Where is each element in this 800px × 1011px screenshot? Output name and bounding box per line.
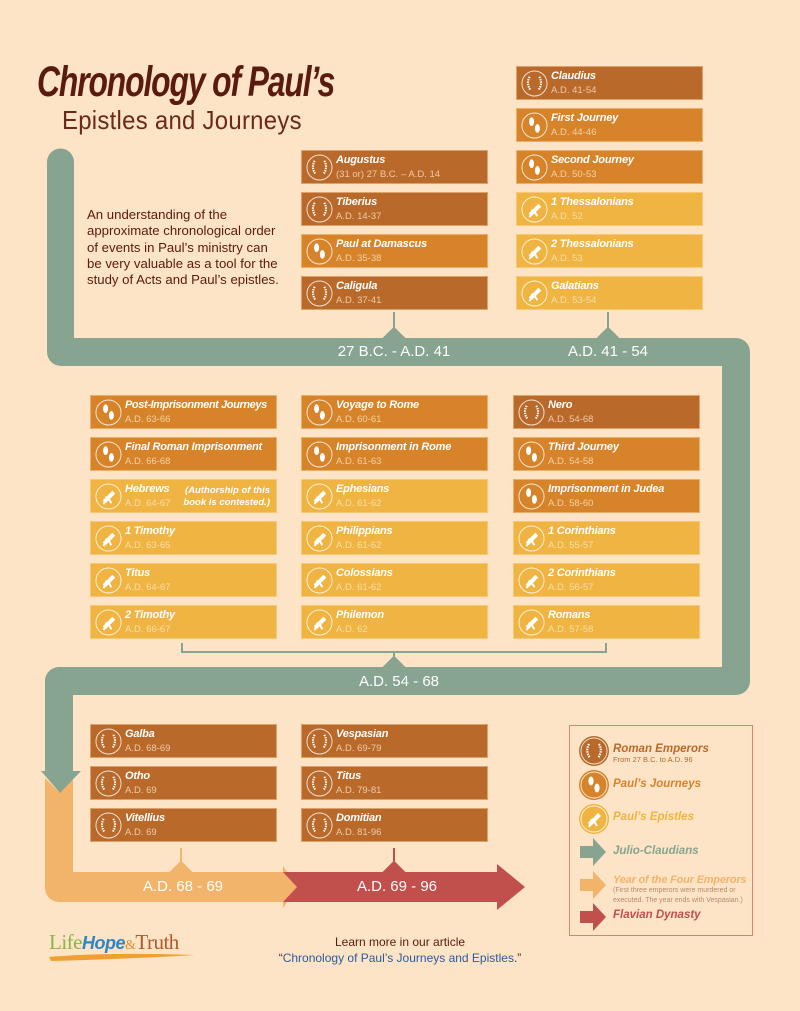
box: 1 Thessalonians: A.D. 52 [551, 211, 583, 222]
box: Ephesians [301, 479, 488, 513]
box: Third Journey: Third Journey [548, 441, 619, 453]
box: 1 Corinthians: 1 Corinthians [548, 525, 616, 537]
box: Otho [90, 766, 277, 800]
legend: Year of the Four Emperors: (First three emperors were murdered or [613, 887, 736, 894]
red arrow [283, 864, 525, 910]
footer text [279, 935, 521, 965]
box: Galba: Galba [125, 728, 155, 740]
box: Domitian [301, 808, 488, 842]
label: AD 54 - 68: A.D. 54 - 68 [359, 673, 439, 690]
box: Post-Imprisonment Journeys: A.D. 63-66 [125, 414, 170, 425]
box: Vespasian: A.D. 69-79 [336, 743, 381, 754]
box: Otho: A.D. 69 [125, 785, 157, 796]
box: Augustus [301, 150, 488, 184]
intro text: approximate chronological order [87, 223, 275, 238]
box: Caligula: Caligula [336, 280, 377, 292]
box: Nero [513, 395, 700, 429]
green band [45, 148, 750, 773]
box: Romans: A.D. 57-58 [548, 624, 593, 635]
box: Hebrews: A.D. 64-67 [125, 498, 170, 509]
box: Voyage to Rome: Voyage to Rome [336, 399, 419, 411]
box: Vespasian [301, 724, 488, 758]
legend: journeys icon [579, 770, 609, 800]
box: Second Journey: Second Journey [551, 154, 634, 166]
box: Otho: Otho [125, 770, 150, 782]
box: Domitian: A.D. 81-96 [336, 827, 381, 838]
box: Hebrews: Hebrews [125, 483, 169, 495]
box: Galatians: A.D. 53-54 [551, 295, 596, 306]
legend: epistles icon [579, 804, 609, 834]
box: Claudius [516, 66, 703, 100]
box: 1 Timothy: 1 Timothy [125, 525, 175, 537]
box: Philemon [301, 605, 488, 639]
label: AD 68 - 69: A.D. 68 - 69 [143, 878, 223, 895]
legend: emperors icon [579, 736, 609, 766]
box: Titus emperor: A.D. 79-81 [336, 785, 381, 796]
box: Nero: A.D. 54-68 [548, 414, 593, 425]
box: Voyage to Rome: A.D. 60-61 [336, 414, 381, 425]
box: Domitian: Domitian [336, 812, 381, 824]
intro text: of events in Paul’s ministry can [87, 240, 268, 255]
box: Philippians: A.D. 61-62 [336, 540, 381, 551]
box: 2 Timothy [90, 605, 277, 639]
box: 1 Corinthians: A.D. 55-57 [548, 540, 593, 551]
box: Titus emperor [301, 766, 488, 800]
footer text: Learn more in our article [335, 935, 465, 949]
green arrowhead [41, 771, 81, 793]
legend: Julio-Claudians: Julio-Claudians [613, 845, 699, 857]
legend: Roman Emperors [613, 743, 709, 764]
box: Vitellius: A.D. 69 [125, 827, 157, 838]
box: 1 Thessalonians [516, 192, 703, 226]
box: Caligula: A.D. 37-41 [336, 295, 381, 306]
box: 2 Timothy: 2 Timothy [125, 609, 175, 621]
legend: Year of the Four Emperors [613, 874, 746, 904]
box: Colossians [301, 563, 488, 597]
label: AD 41 - 54: A.D. 41 - 54 [568, 343, 648, 360]
box: Titus epistle [90, 563, 277, 597]
box: Vitellius [90, 808, 277, 842]
box: Hebrews: book is contested.) [183, 497, 270, 508]
box: Claudius: A.D. 41-54 [551, 85, 596, 96]
box: Paul at Damascus: A.D. 35-38 [336, 253, 381, 264]
box: 2 Timothy: A.D. 66-67 [125, 624, 170, 635]
box: 1 Corinthians [513, 521, 700, 555]
box: Hebrews [90, 479, 277, 513]
connectors [182, 312, 618, 667]
subtitle: Epistles and Journeys [62, 105, 302, 135]
box: Augustus: (31 or) 27 B.C. – A.D. 14 [336, 169, 440, 180]
label: 27 BC - AD 41: 27 B.C. - A.D. 41 [338, 343, 450, 360]
box: Imprisonment in Rome [301, 437, 488, 471]
box: 2 Corinthians [513, 563, 700, 597]
title: Chronology of Paul’s [37, 58, 334, 106]
legend: green arrow [580, 838, 606, 866]
box: Voyage to Rome [301, 395, 488, 429]
box: Caligula [301, 276, 488, 310]
box: Galatians [516, 276, 703, 310]
legend: Paul's Journeys: Paul’s Journeys [613, 778, 701, 790]
legend: red arrow [580, 903, 606, 931]
box: 2 Corinthians: A.D. 56-57 [548, 582, 593, 593]
box: Titus epistle: Titus [125, 567, 150, 579]
box: 1 Timothy [90, 521, 277, 555]
box: Philemon: A.D. 62 [336, 624, 368, 635]
box: 2 Corinthians: 2 Corinthians [548, 567, 616, 579]
box: Nero: Nero [548, 399, 572, 411]
box: 2 Thessalonians: A.D. 53 [551, 253, 583, 264]
box: Colossians: A.D. 61-62 [336, 582, 381, 593]
box: First Journey: A.D. 44-46 [551, 127, 596, 138]
intro text: An understanding of the [87, 207, 227, 222]
box: Third Journey: A.D. 54-58 [548, 456, 593, 467]
legend: Paul's Epistles: Paul’s Epistles [613, 811, 694, 823]
box: Tiberius: A.D. 14-37 [336, 211, 381, 222]
box: Tiberius: Tiberius [336, 196, 377, 208]
box: Imprisonment in Rome: A.D. 61-63 [336, 456, 381, 467]
box: Third Journey [513, 437, 700, 471]
box: Philemon: Philemon [336, 609, 384, 621]
box: Augustus: Augustus [336, 154, 385, 166]
footer text: “Chronology of Paul’s Journeys and Epistles.” [279, 951, 521, 965]
box: Philippians: Philippians [336, 525, 392, 537]
logo [49, 930, 194, 961]
box: Titus emperor: Titus [336, 770, 361, 782]
legend: Year of the Four Emperors: Year of the Four Emperors [613, 874, 746, 886]
orange band [45, 778, 297, 908]
box: Vespasian: Vespasian [336, 728, 388, 740]
legend: Roman Emperors: Roman Emperors [613, 743, 709, 755]
intro text [87, 207, 279, 287]
box: 2 Thessalonians [516, 234, 703, 268]
box: Second Journey [516, 150, 703, 184]
box: Galba [90, 724, 277, 758]
box: Ephesians: A.D. 61-62 [336, 498, 381, 509]
legend: Roman Emperors: From 27 B.C. to A.D. 96 [613, 755, 693, 764]
box: Final Roman Imprisonment [90, 437, 277, 471]
box: Romans: Romans [548, 609, 590, 621]
box: Imprisonment in Judea [513, 479, 700, 513]
box: 1 Timothy: A.D. 63-65 [125, 540, 170, 551]
intro text: study of Acts and Paul’s epistles. [87, 272, 279, 287]
legend [569, 725, 753, 936]
box: First Journey [516, 108, 703, 142]
box: Titus epistle: A.D. 64-67 [125, 582, 170, 593]
box: Paul at Damascus [301, 234, 488, 268]
legend: Flavian Dynasty: Flavian Dynasty [613, 909, 701, 921]
box: Tiberius [301, 192, 488, 226]
box: Final Roman Imprisonment: A.D. 66-68 [125, 456, 170, 467]
box: Vitellius: Vitellius [125, 812, 165, 824]
box: Post-Imprisonment Journeys [90, 395, 277, 429]
legend: light orange arrow [580, 871, 606, 899]
box: Philippians [301, 521, 488, 555]
box: 1 Thessalonians: 1 Thessalonians [551, 196, 634, 208]
box: Galba: A.D. 68-69 [125, 743, 170, 754]
box: Ephesians: Ephesians [336, 483, 389, 495]
box: 2 Thessalonians: 2 Thessalonians [551, 238, 634, 250]
box: Second Journey: A.D. 50-53 [551, 169, 596, 180]
box: Post-Imprisonment Journeys: Post-Imprisonment Journeys [125, 399, 267, 411]
box: First Journey: First Journey [551, 112, 618, 124]
box: Colossians: Colossians [336, 567, 393, 579]
box: Galatians: Galatians [551, 280, 599, 292]
box: Final Roman Imprisonment: Final Roman Imprisonment [125, 441, 262, 453]
intro text: be very valuable as a tool for the [87, 256, 278, 271]
box: Paul at Damascus: Paul at Damascus [336, 238, 427, 250]
label: AD 69 - 96: A.D. 69 - 96 [357, 878, 437, 895]
box: Imprisonment in Judea: Imprisonment in Judea [548, 483, 664, 495]
logo: LifeHope&Truth [49, 930, 179, 954]
box: Imprisonment in Judea: A.D. 58-60 [548, 498, 593, 509]
box: Hebrews: (Authorship of this [185, 485, 270, 496]
box: Romans [513, 605, 700, 639]
box: Claudius: Claudius [551, 70, 596, 82]
box: Imprisonment in Rome: Imprisonment in Rome [336, 441, 451, 453]
legend: Year of the Four Emperors: executed. The year ends with Vespasian.) [613, 897, 743, 904]
